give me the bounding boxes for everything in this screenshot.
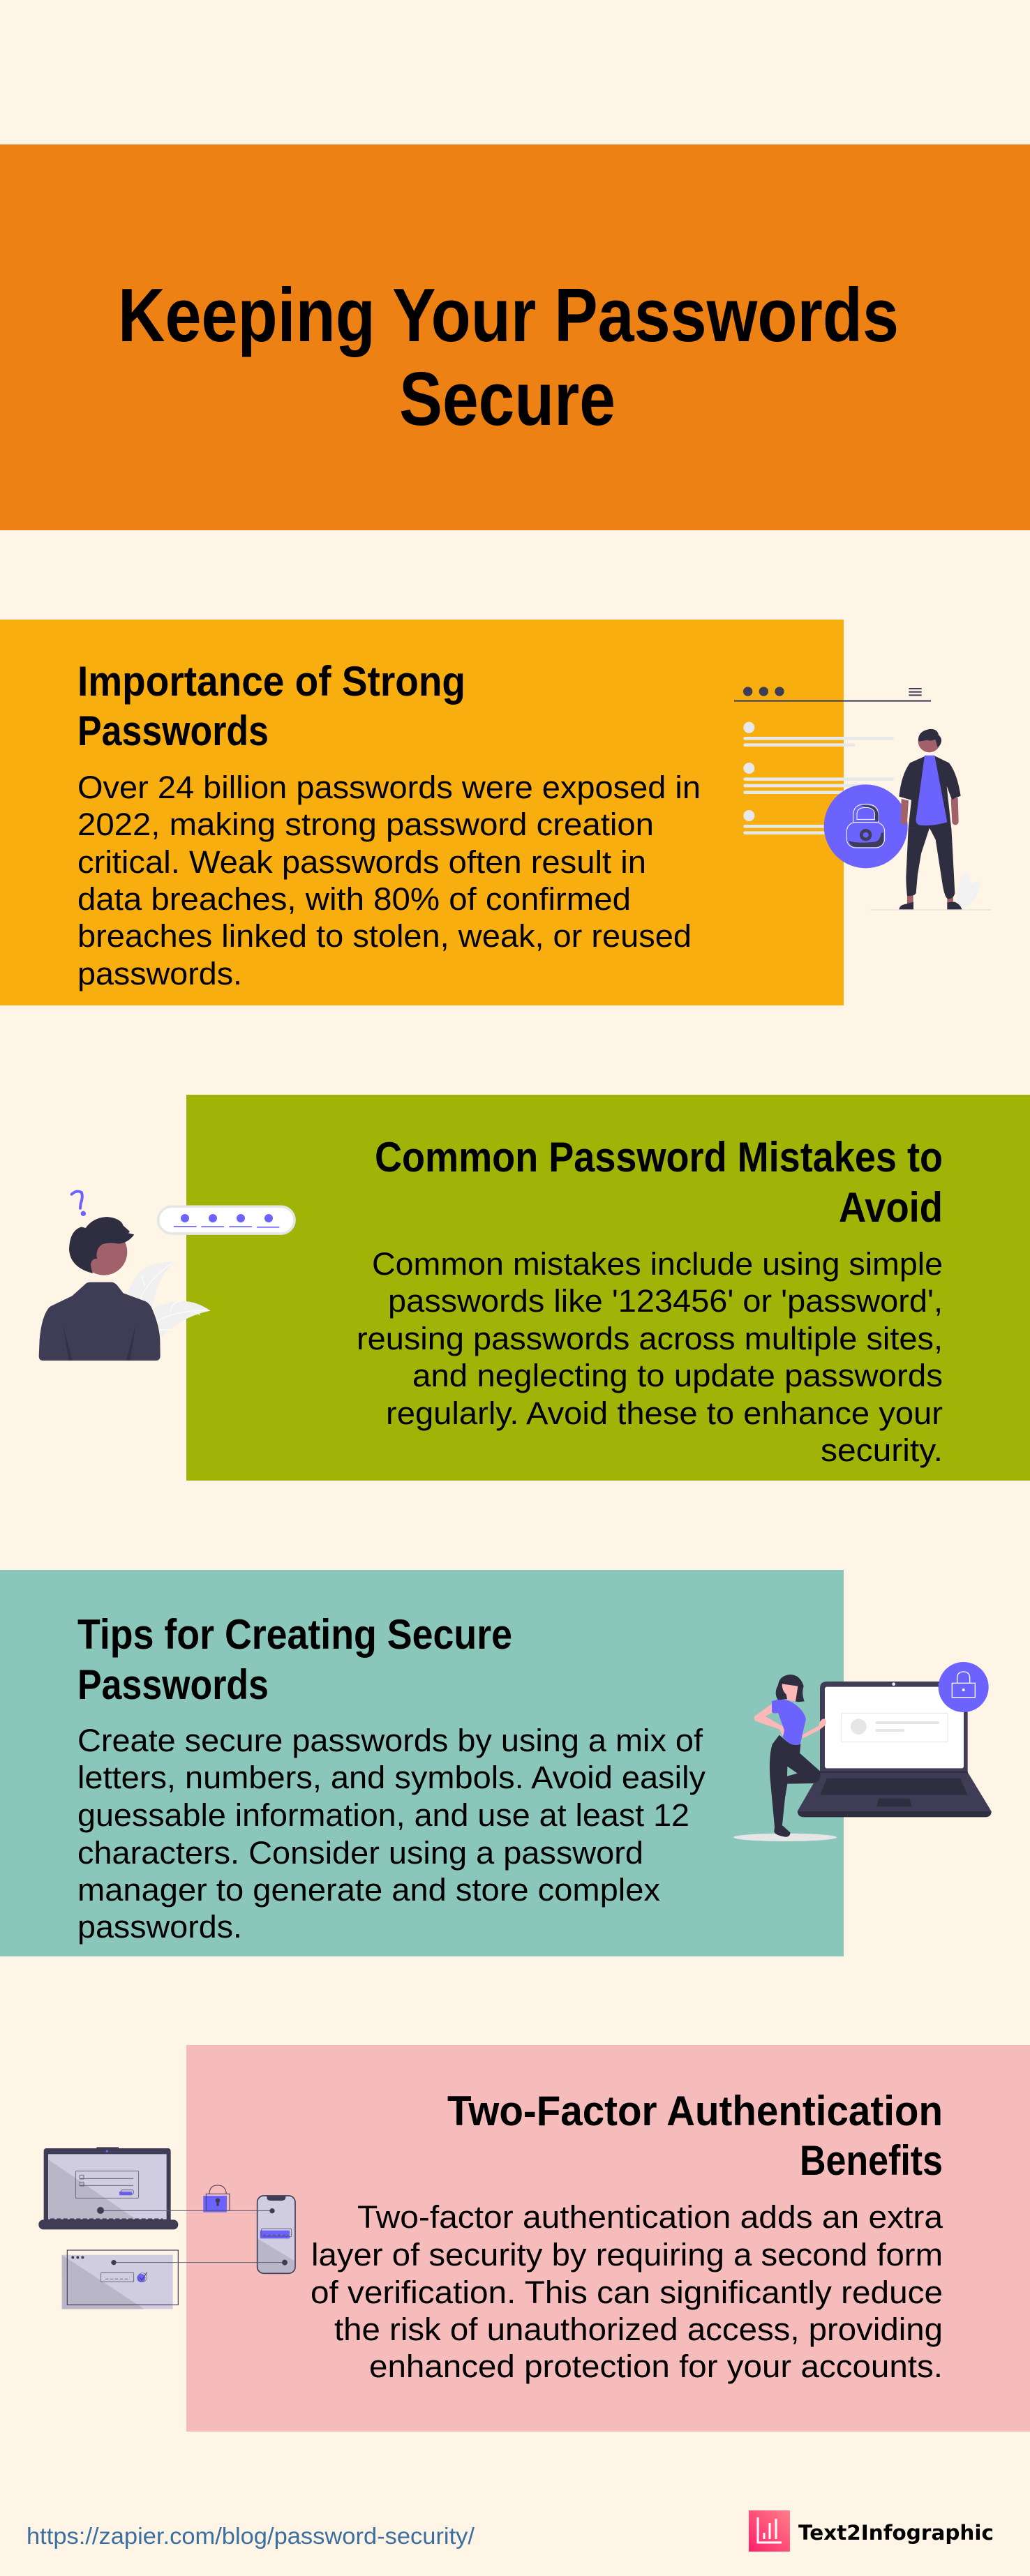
- heading: mistakes: Avoid: [839, 1184, 943, 1231]
- heading: importance: Importance of Strong: [77, 658, 465, 705]
- heading: importance: [77, 658, 465, 754]
- text block: mistakes: regularly. Avoid these to enhance your: [386, 1395, 943, 1431]
- illustration: woman leaning on laptop with lock badge: [733, 1662, 992, 1841]
- text block: mistakes: and neglecting to update passwords: [412, 1358, 943, 1393]
- text block: importance: [77, 770, 701, 991]
- source link: https://zapier.com/blog/password-security/: [27, 2523, 475, 2549]
- text block: mistakes: Common mistakes include using simple: [372, 1246, 943, 1282]
- title: [118, 273, 899, 442]
- text block: two-factor: Two-factor authentication adds an extra: [357, 2199, 943, 2235]
- panel: two-factor authentication benefits: [186, 2045, 1030, 2432]
- title: Keeping Your Passwords: [118, 273, 899, 358]
- heading: tips: [77, 1611, 512, 1708]
- heading: mistakes: [375, 1134, 943, 1231]
- text block: two-factor: the risk of unauthorized access, providing: [334, 2312, 943, 2347]
- heading: two-factor: Benefits: [800, 2137, 943, 2184]
- heading: importance: Passwords: [77, 707, 269, 754]
- title: Secure: [399, 357, 615, 442]
- heading: mistakes: Common Password Mistakes to: [375, 1134, 943, 1181]
- text block: two-factor: layer of security by requiring a second form: [311, 2237, 943, 2272]
- text block: tips: manager to generate and store complex: [77, 1872, 661, 1908]
- text block: importance: 2022, making strong password creation: [77, 807, 654, 842]
- text block: tips: Create secure passwords by using a mix of: [77, 1723, 703, 1758]
- text block: mistakes: security.: [821, 1432, 943, 1468]
- brand: Text2Infographic: Text2Infographic: [798, 2521, 994, 2545]
- heading: two-factor: Two-Factor Authentication: [447, 2088, 943, 2134]
- panel: importance of strong passwords: [0, 620, 844, 1005]
- heading: two-factor: [447, 2088, 943, 2184]
- text block: two-factor: of verification. This can significantly reduce: [311, 2275, 943, 2310]
- text block: importance: critical. Weak passwords often result in: [77, 844, 646, 880]
- text block: importance: Over 24 billion passwords were exposed in: [77, 770, 701, 805]
- heading: tips: Passwords: [77, 1661, 269, 1708]
- text block: tips: letters, numbers, and symbols. Avoid easily: [77, 1760, 706, 1795]
- illustration: laptop, browser and phone linked with lock: [38, 2147, 295, 2309]
- text block: importance: breaches linked to stolen, weak, or reused: [77, 918, 692, 954]
- illustration: person guessing a password: [39, 1191, 294, 1361]
- heading: tips: Tips for Creating Secure: [77, 1611, 512, 1658]
- text block: mistakes: passwords like '123456' or 'password',: [388, 1283, 943, 1319]
- text block: tips: passwords.: [77, 1909, 242, 1945]
- illustration: man with lock and web page: [734, 687, 991, 910]
- text block: tips: characters. Consider using a password: [77, 1835, 643, 1871]
- text block: tips: [77, 1723, 706, 1945]
- text block: tips: guessable information, and use at least 12: [77, 1797, 689, 1833]
- icon: chart logo: [749, 2510, 790, 2552]
- brand: Text2Infographic: [749, 2510, 994, 2552]
- text block: importance: passwords.: [77, 956, 242, 991]
- panel: tips for creating secure passwords: [0, 1570, 844, 1956]
- panel: common password mistakes: [186, 1095, 1030, 1481]
- title banner: [0, 144, 1030, 530]
- text block: two-factor: [311, 2199, 943, 2384]
- text block: mistakes: reusing passwords across multiple sites,: [357, 1321, 943, 1356]
- text block: importance: data breaches, with 80% of confirmed: [77, 881, 631, 917]
- text block: mistakes: [357, 1246, 943, 1468]
- text block: two-factor: enhanced protection for your accounts.: [369, 2349, 943, 2384]
